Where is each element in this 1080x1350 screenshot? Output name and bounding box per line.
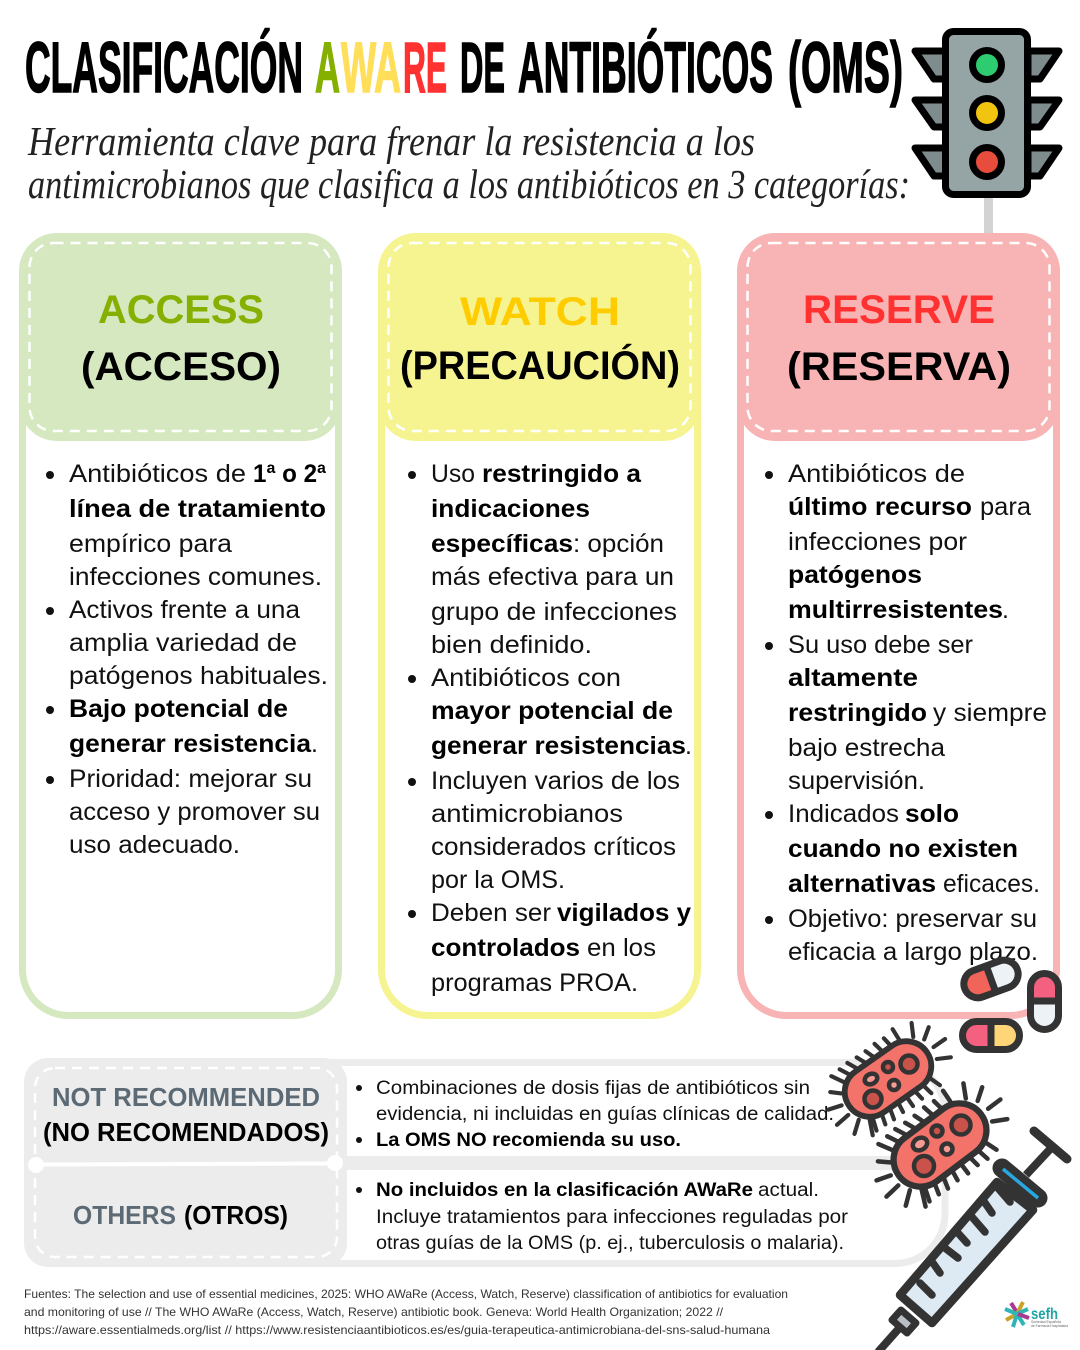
panel: watch <box>378 233 701 1016</box>
text: reserve bullets: infecciones por <box>788 528 967 556</box>
text: watch bullets: antimicrobianos <box>431 800 623 828</box>
text: access bullets: empírico para <box>69 530 232 558</box>
text: watch bullets: controlados <box>431 934 580 962</box>
text: sources: https://aware.essentialmeds.org/list // https://www.resistenciaantibioticos.es/es/guia-terapeutica-antimicrobiana-del-sns-salud-humana <box>24 1323 770 1337</box>
text: others bullets: Incluye tratamientos para infecciones reguladas por <box>376 1207 849 1228</box>
text: watch bullets: en los <box>587 934 656 962</box>
text: reserve bullets: solo <box>905 800 959 828</box>
heading: access: (ACCESO) <box>81 345 281 389</box>
text: others bullets: otras guías de la OMS (p. ej., tuberculosis o malaria). <box>376 1233 844 1254</box>
text: access bullets: Antibióticos de <box>69 460 246 488</box>
text: reserve bullets: Objetivo: preservar su <box>788 905 1037 933</box>
text: reserve bullets: restringido <box>788 699 927 727</box>
icon: syringe <box>878 1131 1067 1350</box>
text: reserve bullets: y siempre <box>933 699 1047 727</box>
text: watch bullets: por la OMS. <box>431 866 565 894</box>
text: access bullets: infecciones comunes. <box>69 563 322 591</box>
text: access bullets: uso adecuado. <box>69 831 240 859</box>
text: reserve bullets: Su uso debe ser <box>788 631 973 659</box>
panel: access <box>19 233 342 1016</box>
heading: reserve <box>787 288 1011 389</box>
heading: not recommended: (NO RECOMENDADOS) <box>43 1117 329 1147</box>
logo: sefh: sefh <box>1031 1306 1058 1323</box>
heading: reserve: RESERVE <box>803 288 995 332</box>
text: others bullets: actual. <box>758 1180 819 1201</box>
text: reserve bullets: eficacia a largo plazo. <box>788 938 1038 966</box>
text: not recommended bullets: La OMS NO recomienda su uso. <box>376 1130 681 1151</box>
title: CLASIFICACIÓN <box>25 29 303 108</box>
text: reserve bullets: bajo estrecha <box>788 734 945 762</box>
heading: others <box>73 1200 288 1230</box>
text: reserve bullets: para <box>980 493 1031 521</box>
text: watch bullets: Incluyen varios de los <box>431 767 680 795</box>
text: reserve bullets: multirresistentes <box>788 596 1003 624</box>
text: reserve bullets: supervisión. <box>788 767 925 795</box>
heading: watch: WATCH <box>460 290 620 334</box>
text: others bullets: No incluidos en la clasificación AWaRe <box>376 1180 753 1201</box>
text: reserve bullets: cuando no existen <box>788 835 1018 863</box>
heading: watch: (PRECAUCIÓN) <box>400 342 680 388</box>
text: reserve bullets: último recurso <box>788 493 972 521</box>
text: access bullets: . <box>311 730 318 758</box>
panel: not recommended and others <box>24 1058 945 1267</box>
text: watch bullets: indicaciones <box>431 495 590 523</box>
text: access bullets: Bajo potencial de <box>69 695 288 723</box>
subtitle <box>27 118 910 207</box>
text: access bullets: acceso y promover su <box>69 798 320 826</box>
icon: capsule tilted <box>959 956 1023 1002</box>
text: not recommended bullets: evidencia, ni incluidas en guías clínicas de calidad. <box>376 1104 834 1125</box>
text: access bullets: generar resistencia <box>69 730 312 758</box>
text: watch bullets: restringido a <box>482 460 642 488</box>
text: access bullets: Prioridad: mejorar su <box>69 765 312 793</box>
icon: bacterium upper <box>810 1008 967 1149</box>
text: watch bullets: considerados críticos <box>431 833 676 861</box>
text: not recommended bullets: Combinaciones de dosis fijas de antibióticos sin <box>376 1078 810 1099</box>
icon: capsule horizontal <box>961 1021 1020 1050</box>
text: watch bullets: . <box>685 732 692 760</box>
text: access bullets <box>46 460 328 859</box>
title: DE <box>460 29 505 108</box>
text: reserve bullets <box>765 460 1047 966</box>
text: reserve bullets: patógenos <box>788 561 922 589</box>
title: (OMS) <box>788 29 903 108</box>
text: others bullets <box>356 1180 849 1254</box>
text: reserve bullets: altamente <box>788 664 918 692</box>
heading: others: (OTROS) <box>184 1200 288 1230</box>
text: watch bullets: bien definido. <box>431 631 592 659</box>
text: reserve bullets: eficaces. <box>943 870 1040 898</box>
heading: access: ACCESS <box>98 288 264 332</box>
heading: watch <box>400 290 680 388</box>
logo: sefh: de Farmacia Hospitalaria <box>1031 1323 1069 1328</box>
icon: traffic light <box>915 32 1059 237</box>
text: sources <box>24 1287 788 1337</box>
title: ANTIBIÓTICOS <box>518 29 773 108</box>
text: sources: and monitoring of use // The WHO AWaRe (Access, Watch, Reserve) antibiotic book. Geneva: World Health Organization; 2022 // <box>24 1305 724 1319</box>
logo: sefh <box>1005 1302 1069 1328</box>
text: reserve bullets: Antibióticos de <box>788 460 965 488</box>
text: watch bullets: Antibióticos con <box>431 664 621 692</box>
subtitle: antimicrobianos que clasifica a los antibióticos en 3 categorías: <box>28 161 910 207</box>
text: watch bullets: generar resistencias <box>431 732 686 760</box>
heading: not recommended: NOT RECOMMENDED <box>52 1082 320 1112</box>
title: WA <box>341 29 401 108</box>
icon: capsule vertical <box>1030 972 1059 1030</box>
text: access bullets: línea de tratamiento <box>69 495 326 523</box>
text: reserve bullets: Indicados <box>788 800 899 828</box>
text: reserve bullets: alternativas <box>788 870 936 898</box>
heading: reserve: (RESERVA) <box>787 345 1011 389</box>
text: watch bullets: más efectiva para un <box>431 563 674 591</box>
text: watch bullets: Uso <box>431 460 475 488</box>
text: access bullets: amplia variedad de <box>69 629 297 657</box>
text: watch bullets <box>408 460 692 997</box>
heading: not recommended <box>43 1082 329 1147</box>
logo: sefh: Sociedad Española <box>1031 1319 1062 1324</box>
text: watch bullets: programas PROA. <box>431 969 638 997</box>
panel: reserve <box>737 233 1060 1016</box>
text: watch bullets: específicas <box>431 530 573 558</box>
text: watch bullets: mayor potencial de <box>431 697 673 725</box>
title <box>25 29 903 108</box>
text: sources: Fuentes: The selection and use of essential medicines, 2025: WHO AWaRe (Access, Watch, Reserve) classification of antibiotics for evaluation <box>24 1287 788 1301</box>
text: watch bullets: vigilados y <box>557 899 691 927</box>
text: watch bullets: : opción <box>573 530 664 558</box>
subtitle: Herramienta clave para frenar la resistencia a los <box>27 118 755 164</box>
text: access bullets: Activos frente a una <box>69 596 300 624</box>
heading: access <box>81 288 281 389</box>
title: A <box>315 29 340 108</box>
text: watch bullets: Deben ser <box>431 899 551 927</box>
text: access bullets: patógenos habituales. <box>69 662 328 690</box>
text: not recommended bullets <box>356 1078 834 1151</box>
text: reserve bullets: . <box>1002 596 1009 624</box>
icon: bacterium lower <box>856 1066 1025 1222</box>
title: RE <box>403 29 447 108</box>
heading: others: OTHERS <box>73 1200 176 1230</box>
text: watch bullets: grupo de infecciones <box>431 598 677 626</box>
text: access bullets: 1ª o 2ª <box>253 460 327 488</box>
